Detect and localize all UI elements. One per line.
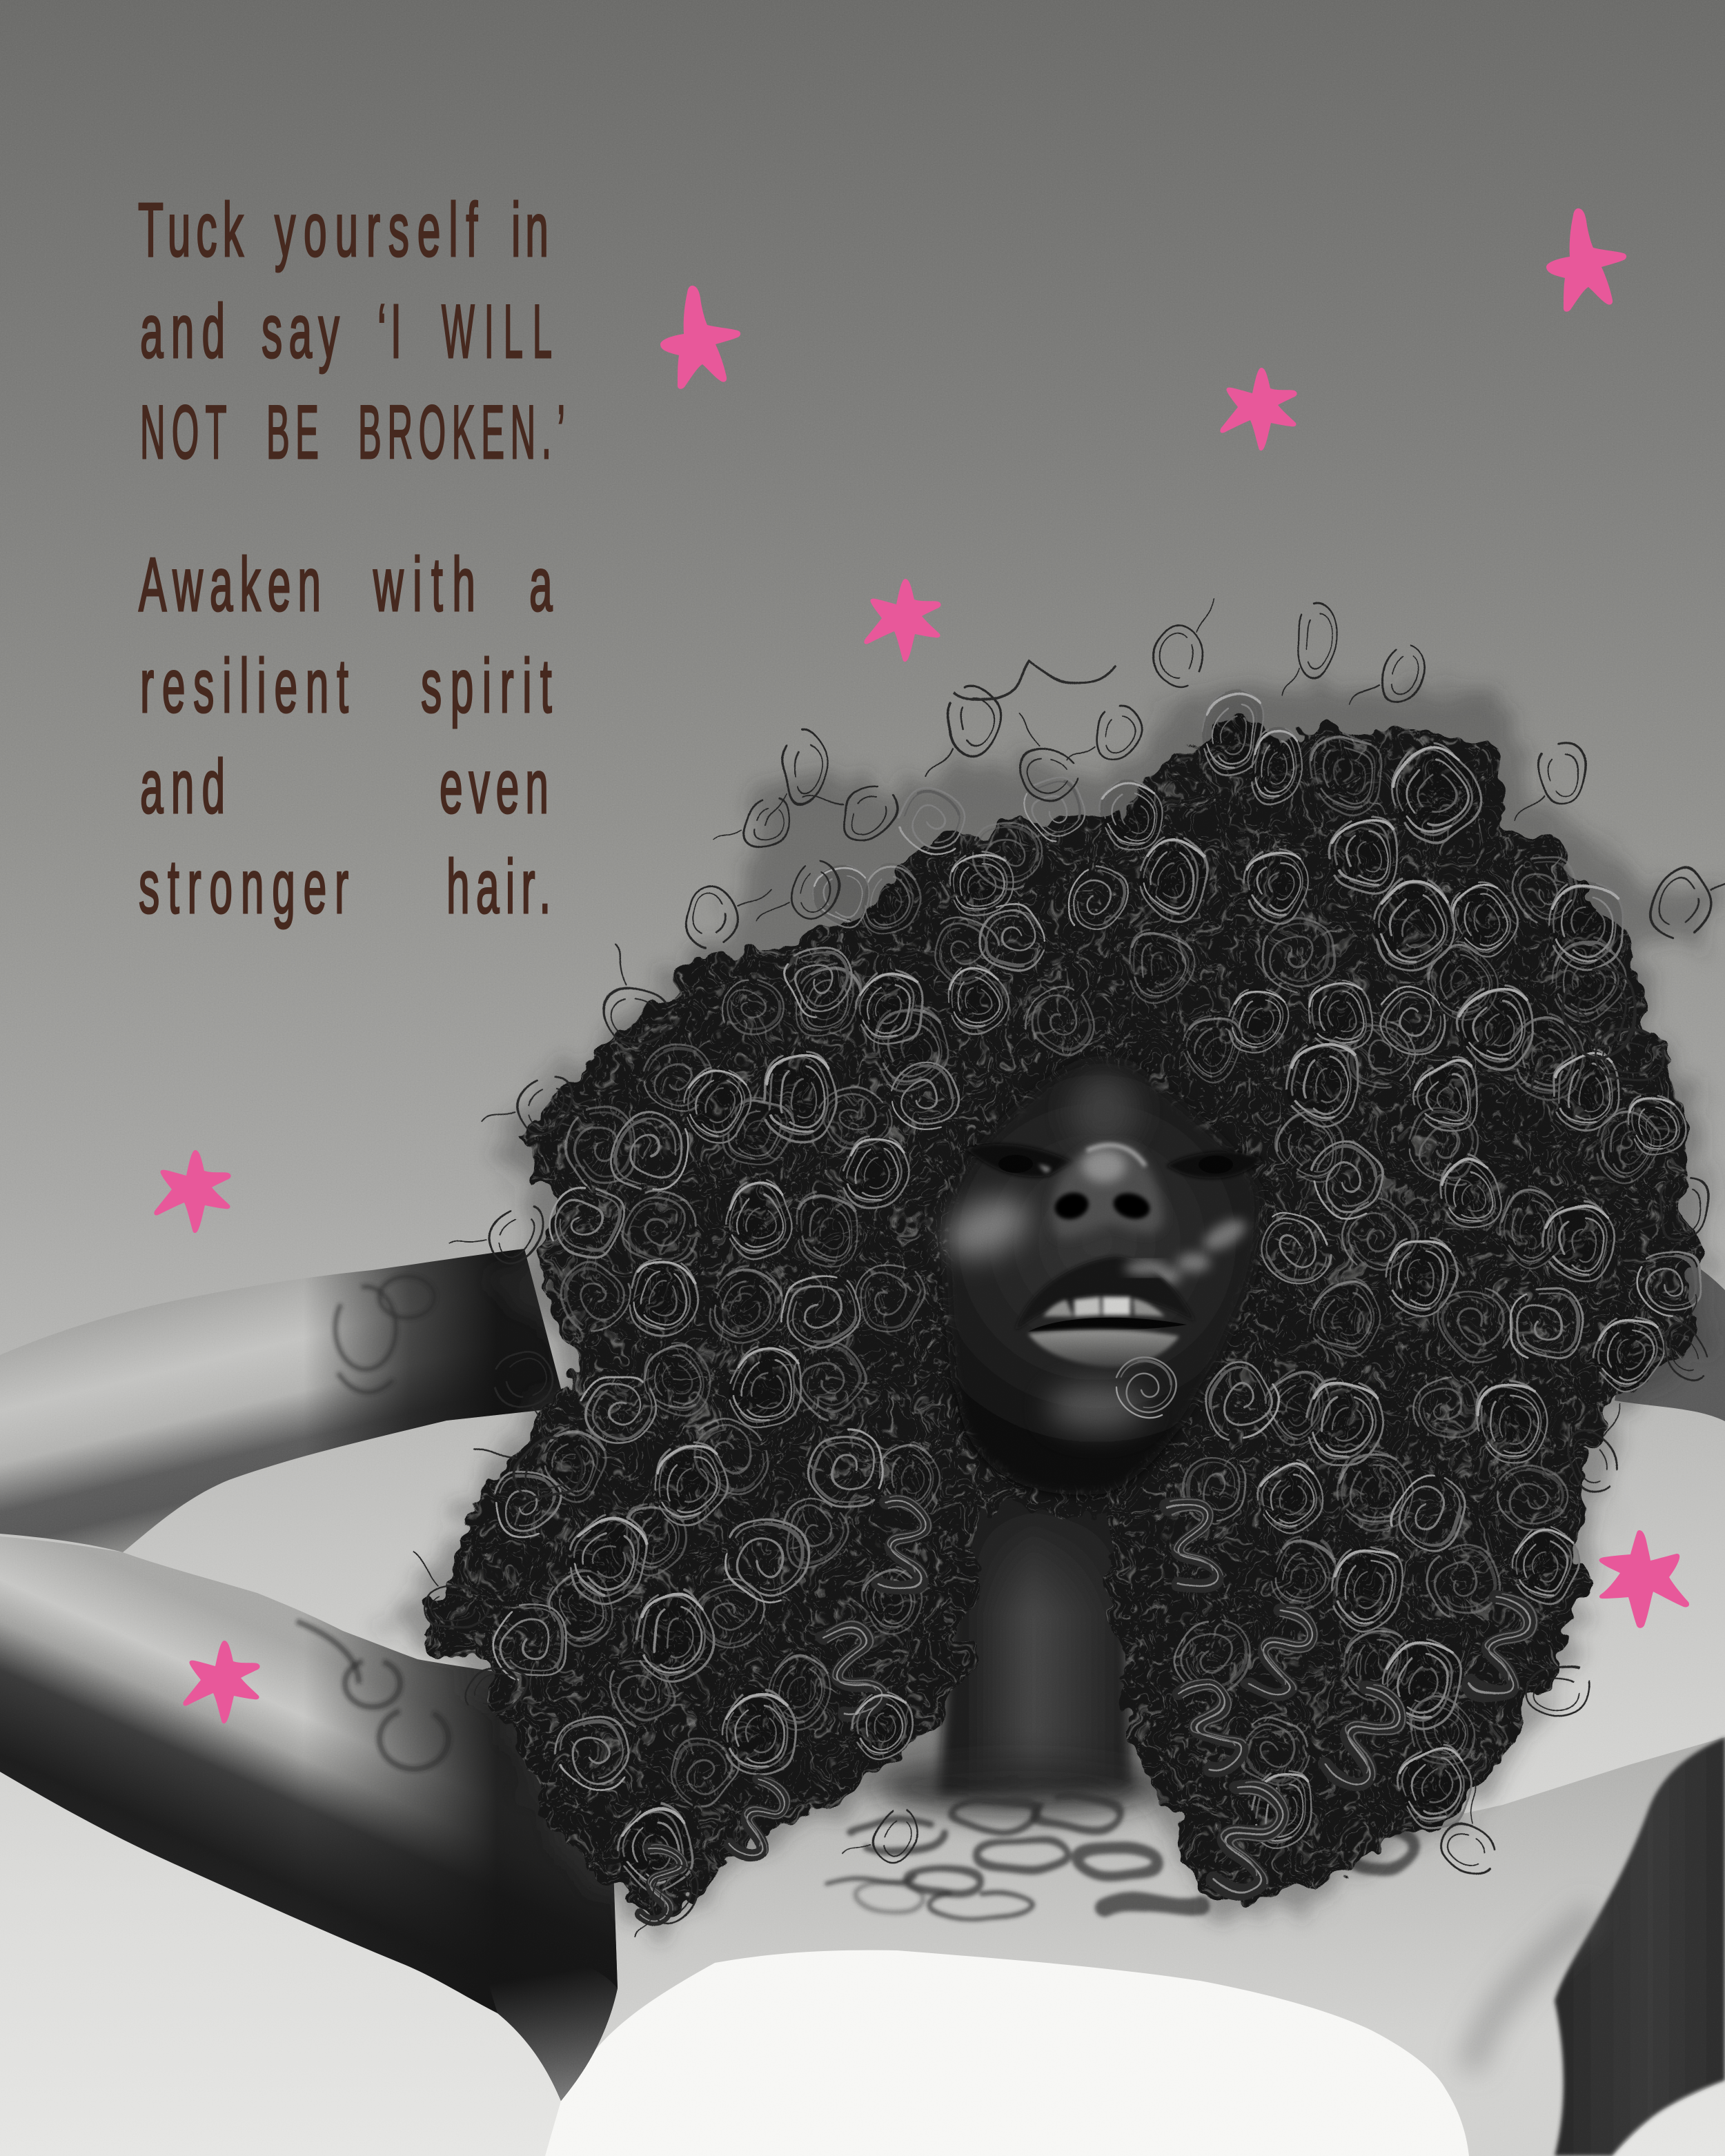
curl shadow on forearm xyxy=(335,1276,435,1392)
right arm in shadow xyxy=(1555,1737,1725,2156)
teeth xyxy=(1043,1297,1165,1316)
chest and shoulders xyxy=(561,1670,1725,2156)
photo: woman with voluminous curly hair xyxy=(0,598,1725,2156)
stray curls at hair edge xyxy=(404,600,1725,1937)
star 2 xyxy=(1546,208,1626,312)
hair frizz halo xyxy=(386,683,1718,1939)
curl over chin xyxy=(1105,1346,1185,1427)
text block: first paragraph: WILL xyxy=(442,289,552,374)
text block: first paragraph: yourself xyxy=(275,188,477,273)
nose xyxy=(1052,1145,1163,1238)
text block: second paragraph: stronger xyxy=(139,844,348,929)
text block: second paragraph: and xyxy=(140,744,225,829)
forehead glow xyxy=(1070,1073,1138,1149)
star 6 xyxy=(183,1641,260,1723)
hair shadow on chest xyxy=(828,1798,1414,1918)
text block: second paragraph: Awaken xyxy=(139,542,321,627)
curls: bright layer xyxy=(480,684,1714,1921)
neck base shadow xyxy=(876,1758,1166,1816)
lip highlight xyxy=(1125,1262,1166,1274)
forearm xyxy=(0,1249,566,1552)
text block: second paragraph: hair. xyxy=(446,844,551,929)
text block: first paragraph: Tuck xyxy=(138,188,244,273)
text block: first paragraph: NOT xyxy=(140,390,227,475)
hair main mass xyxy=(379,690,1725,1932)
text block: second paragraph: even xyxy=(440,744,549,829)
upper arm xyxy=(0,1536,618,2101)
neck xyxy=(938,1476,1132,1794)
star 1 xyxy=(660,286,740,389)
text block: first paragraph: in xyxy=(511,188,549,273)
text block: first paragraph: BROKEN.’ xyxy=(358,390,565,475)
text block: first paragraph: BE xyxy=(266,390,319,475)
right eye xyxy=(1166,1151,1263,1178)
text block: second paragraph: spirit xyxy=(421,644,552,729)
text block: first paragraph xyxy=(138,188,565,475)
text block: first paragraph: ‘I xyxy=(377,289,402,374)
star 4 xyxy=(864,579,941,662)
left cheek highlight xyxy=(937,1186,1036,1270)
armpit fold shading xyxy=(1470,1911,1594,2070)
face xyxy=(937,1060,1263,1495)
text block: second paragraph: a xyxy=(529,542,553,627)
right cheek highlight xyxy=(1151,1214,1250,1285)
star 7 xyxy=(1599,1530,1689,1628)
stars: pink hand-drawn xyxy=(154,208,1689,1723)
hair strand texture xyxy=(379,690,1725,1932)
mouth interior xyxy=(1028,1318,1187,1332)
text block: second paragraph: resilient xyxy=(140,644,348,729)
bandeau top xyxy=(545,1950,1469,2156)
text block: first paragraph: say xyxy=(262,289,339,374)
lower lip xyxy=(1028,1329,1179,1367)
text block: first paragraph: and xyxy=(140,289,225,374)
upper lip xyxy=(1016,1256,1194,1330)
star 5 xyxy=(154,1150,231,1233)
curl shadow on upper arm xyxy=(297,1621,448,1769)
chin highlight xyxy=(1049,1384,1145,1431)
left eye xyxy=(966,1144,1073,1177)
elbow tip gradient xyxy=(483,1957,618,2101)
right hand behind hair xyxy=(1615,1249,1725,1421)
text block: second paragraph: with xyxy=(373,542,475,627)
curls: dim layer xyxy=(530,726,1671,1818)
star 3 xyxy=(1220,368,1297,451)
text block: second paragraph xyxy=(139,542,553,929)
